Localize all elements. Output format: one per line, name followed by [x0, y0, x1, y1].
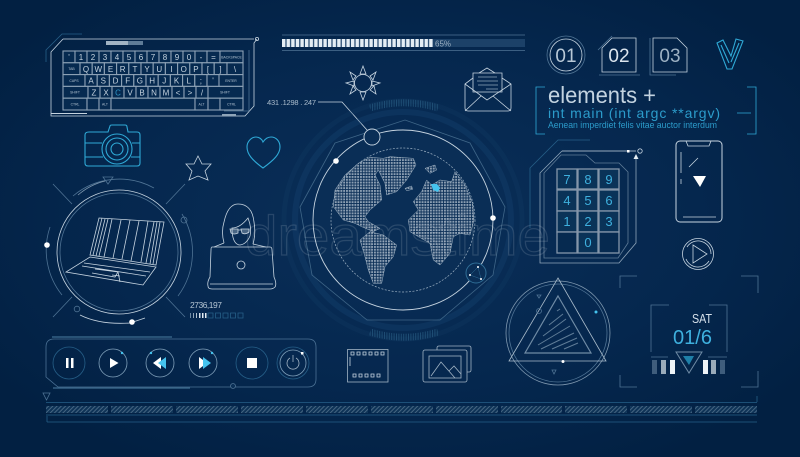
icon: woman at laptop [208, 204, 276, 289]
button: power [277, 347, 309, 379]
keyboard row 3: H [149, 77, 155, 86]
keyboard row 3: K [174, 77, 180, 86]
panel: index numbers [547, 36, 687, 75]
keyboard row 4: C [115, 88, 121, 97]
keyboard row 3: ' [212, 77, 214, 86]
keyboard row 4: < [176, 88, 181, 97]
keyboard row 5: CTRL [227, 102, 236, 106]
keyboard row 1: BACKSPACE [221, 56, 242, 60]
indicator triangle [676, 352, 702, 373]
keyboard row 2: T [132, 65, 137, 74]
icon: play circle [682, 238, 714, 270]
keyboard row 4 [63, 86, 243, 98]
keyboard row 4: V [127, 88, 133, 97]
keyboard row 3: F [125, 77, 130, 86]
continents [333, 157, 474, 283]
keyboard row 1 [63, 51, 243, 63]
text: counter readout [190, 300, 243, 318]
keyboard row 2: \ [234, 65, 237, 74]
keypad keys: 0 [584, 235, 592, 250]
button: forward [189, 349, 217, 377]
glow rings [284, 101, 522, 339]
marker: highlighted region [431, 184, 440, 192]
keyboard row 4: Z [92, 88, 97, 97]
day: SAT [692, 311, 712, 326]
keyboard row 2: E [108, 65, 113, 74]
panel: keypad [530, 140, 642, 263]
keyboard row 4: / [201, 88, 204, 97]
button: pause [53, 347, 85, 379]
keyboard row 1: 4 [115, 53, 120, 62]
icon: smartphone [676, 141, 722, 222]
keyboard row 2: P [193, 65, 199, 74]
keyboard row 1: 9 [175, 53, 180, 62]
badge 03: 03 [659, 46, 681, 67]
date: 01/6 [673, 327, 712, 349]
icon: laptop [66, 218, 164, 285]
button: rewind [146, 349, 174, 377]
triangles [509, 278, 606, 361]
keyboard row 1: 2 [91, 53, 96, 62]
keyboard row 4: SHIFT [70, 91, 80, 95]
keyboard row 5: CTRL [71, 102, 80, 106]
keyboard row 4: B [139, 88, 145, 97]
keypad keys: 9 [605, 172, 613, 187]
keyboard row 2: TAB [68, 67, 75, 71]
panel: date display [620, 276, 758, 387]
keypad keys: 2 [584, 214, 592, 229]
keyboard row 4: X [103, 88, 109, 97]
keyboard row 2: U [156, 65, 162, 74]
keyboard row 1: 1 [79, 53, 84, 62]
icon: film strip [348, 350, 388, 382]
keypad keys [557, 169, 619, 253]
keyboard row 1: 7 [151, 53, 156, 62]
keyboard row 1: - [200, 53, 203, 62]
keyboard row 4: M [163, 88, 170, 97]
keyboard row 3: G [137, 77, 143, 86]
panel: keyboard [46, 34, 259, 116]
icon: camera [85, 125, 140, 166]
icon: photo stack [423, 346, 471, 382]
keyboard row 2: O [181, 65, 187, 74]
keyboard row 1: ' [68, 53, 70, 62]
keyboard row 2: ] [219, 65, 222, 74]
icon: star [186, 156, 211, 180]
keyboard row 3 [63, 75, 243, 86]
keyboard row 2: Y [144, 65, 150, 74]
constellation [466, 263, 486, 283]
button: stop [236, 347, 268, 379]
keyboard row 3: L [186, 77, 191, 86]
keyboard row 4: > [188, 88, 193, 97]
keypad keys: 8 [584, 172, 592, 187]
panel: media controls [46, 337, 316, 388]
progress bar: 65% [435, 40, 451, 48]
keyboard row 3: D [113, 77, 119, 86]
keyboard row 1: 8 [163, 53, 168, 62]
icon: envelope [465, 68, 511, 111]
timeline strip [43, 393, 757, 422]
panel: laptop dial [44, 177, 193, 325]
code line: int main (int argc **argv) [548, 105, 720, 121]
keyboard row 5: ALT [102, 102, 108, 106]
panel: world globe [284, 101, 522, 339]
keypad keys: 6 [605, 193, 613, 208]
keyboard row 2: R [120, 65, 126, 74]
icon: heart [247, 137, 280, 168]
keypad keys: 4 [563, 193, 571, 208]
keyboard row 4: N [151, 88, 157, 97]
text: counter readout: 2736,197 [190, 300, 222, 310]
watermark: dreamstime [245, 204, 550, 267]
caption: Aenean imperdiet felis vitae auctor interdum [548, 120, 717, 131]
keyboard row 1: 0 [187, 53, 192, 62]
keyboard row 3: A [88, 77, 94, 86]
keyboard row 5: ALT [199, 102, 204, 106]
keyboard row 2: I [170, 65, 173, 74]
keyboard row 5 [63, 98, 243, 110]
dashed ring [331, 148, 475, 292]
keyboard row 2 [63, 63, 243, 75]
icon: sun [346, 66, 380, 100]
hatch fill [538, 309, 578, 349]
keypad keys: 1 [563, 214, 571, 229]
keypad keys: 3 [605, 214, 613, 229]
heading: elements + [548, 82, 656, 108]
orbit dots [333, 158, 496, 221]
keypad keys: 7 [563, 172, 571, 187]
outer octagon [300, 120, 505, 320]
keyboard row 2: [ [207, 65, 210, 74]
keyboard row 1: 3 [103, 53, 108, 62]
keyboard row 2: Q [83, 65, 89, 74]
badge 01: 01 [555, 46, 577, 67]
keyboard row 4: SHIFT [220, 91, 230, 95]
markers [562, 360, 564, 363]
keyboard row 3: CAPS [69, 79, 79, 83]
progress bar [282, 35, 525, 50]
level bars [652, 360, 657, 374]
button: play [99, 349, 127, 377]
keyboard row 3: ; [200, 77, 202, 86]
keyboard row 3: S [101, 77, 106, 86]
leader node [364, 129, 380, 145]
dial arcs and ticks [44, 177, 193, 325]
keyboard row 3: J [162, 77, 166, 86]
text: coordinates with leader: 431 .1298 . 247 [267, 98, 316, 107]
keyboard row 1: 5 [127, 53, 132, 62]
keyboard row 3: ENTER [225, 79, 237, 83]
panel: triangle emblem [506, 278, 610, 385]
text block: elements heading [536, 82, 756, 134]
keypad keys: 5 [584, 193, 592, 208]
badge 02: 02 [608, 46, 630, 67]
keyboard row 1: 6 [139, 53, 144, 62]
keyboard row 2: W [95, 65, 103, 74]
keyboard row 1: = [211, 53, 216, 62]
icon: V logo [717, 39, 743, 69]
orbit ring [313, 130, 493, 310]
text: coordinates with leader [267, 98, 367, 130]
